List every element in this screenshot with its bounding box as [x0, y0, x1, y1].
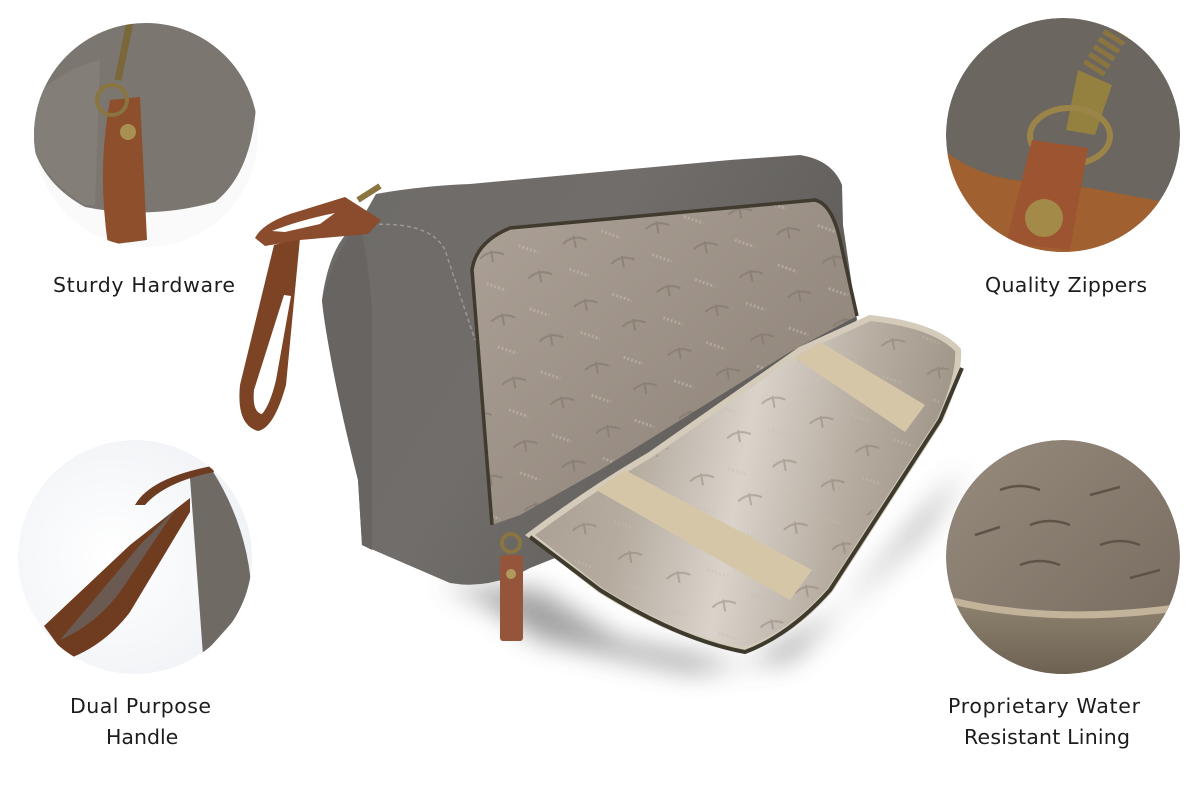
canvas side: [190, 470, 252, 655]
top stitching: [365, 224, 475, 340]
lining pattern: [472, 200, 857, 525]
open flap with lining: [530, 318, 958, 650]
brown leather pull: [103, 97, 147, 245]
label: sturdy hardware: Sturdy Hardware: [53, 273, 235, 297]
lighter canvas highlight: [34, 87, 45, 149]
ground shadow: [440, 470, 965, 672]
label: proprietary water resistant lining: [948, 694, 1141, 749]
elastic straps: [596, 470, 812, 600]
label: proprietary water resistant lining: Proprietary Water: [948, 694, 1141, 718]
side panel shading: [322, 222, 372, 550]
panel: main bag product image: [239, 155, 965, 672]
zipper hardware: [118, 22, 130, 80]
leather tab: [1006, 140, 1088, 250]
pocket trim: [948, 600, 1176, 615]
leather loop: [44, 498, 190, 659]
zipper slider: [1066, 70, 1112, 135]
panel: water resistant lining detail: [946, 440, 1180, 680]
interior lining panel: [472, 200, 857, 525]
mesh pocket: [955, 602, 1169, 674]
zipper teeth: [1092, 28, 1120, 72]
flap zipper: [530, 368, 962, 652]
label: dual purpose handle: [70, 694, 211, 749]
zipper pull: [358, 186, 523, 641]
embossed logos: [975, 486, 1160, 578]
label: dual purpose handle: Dual Purpose: [70, 694, 211, 718]
leather handle: [239, 197, 381, 431]
panel: quality zippers detail: [946, 18, 1180, 260]
panel: dual purpose handle detail: [18, 440, 252, 674]
label: quality zippers: Quality Zippers: [985, 273, 1147, 297]
panel: sturdy hardware detail: [30, 20, 258, 247]
label: proprietary water resistant lining: Resistant Lining: [964, 725, 1130, 749]
bag body: [322, 155, 857, 585]
panel zipper: [472, 200, 857, 525]
leather band: [947, 152, 1160, 252]
flap pattern: [540, 325, 950, 642]
label: dual purpose handle: Handle: [106, 725, 178, 749]
canvas pouch: [30, 20, 257, 212]
